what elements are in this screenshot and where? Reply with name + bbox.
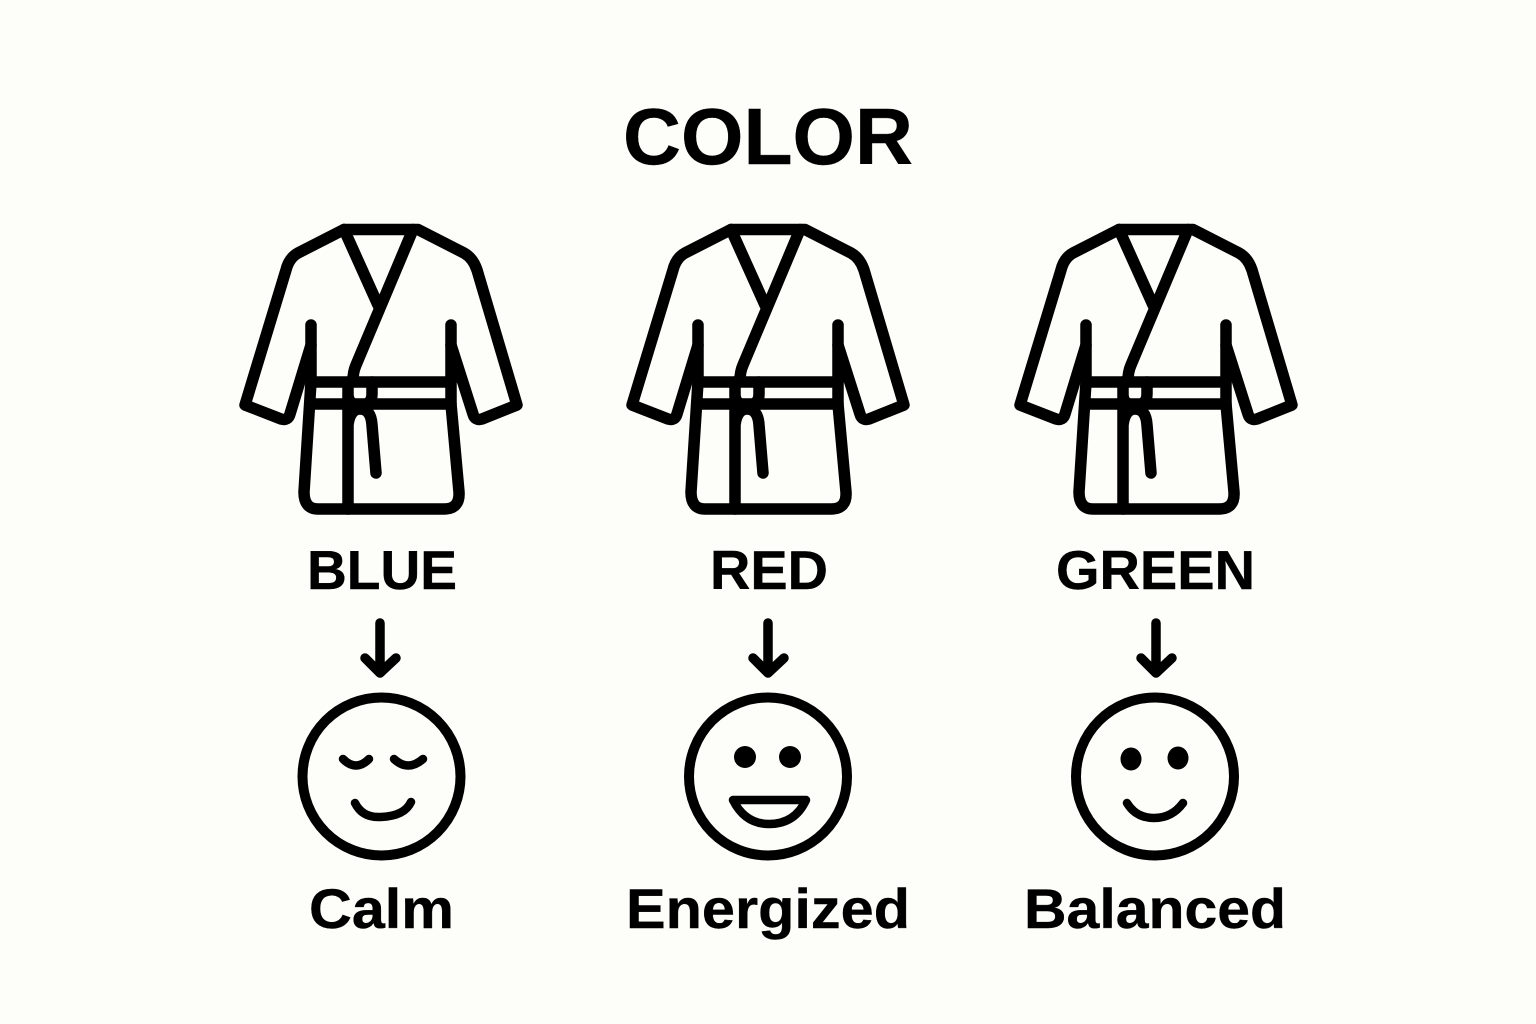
label: balanced: Balanced — [1024, 877, 1286, 940]
icon: red robe — [632, 230, 904, 509]
column: green — [1020, 230, 1292, 940]
arrow: blue to calm — [365, 623, 396, 673]
title: COLOR — [623, 92, 913, 181]
label: green: GREEN — [1056, 539, 1255, 601]
column: red — [626, 230, 910, 940]
icon: energized face — [689, 698, 847, 856]
icon: blue robe — [245, 230, 517, 509]
column: blue — [245, 230, 517, 940]
label: energized: Energized — [626, 877, 910, 940]
icon: balanced face — [1076, 698, 1234, 856]
label: calm: Calm — [309, 877, 454, 940]
label: red: RED — [710, 539, 828, 601]
arrow: green to balanced — [1141, 623, 1172, 673]
arrow: red to energized — [753, 623, 784, 673]
icon: green robe — [1020, 230, 1292, 509]
label: blue: BLUE — [307, 539, 457, 601]
icon: calm face — [302, 698, 460, 856]
